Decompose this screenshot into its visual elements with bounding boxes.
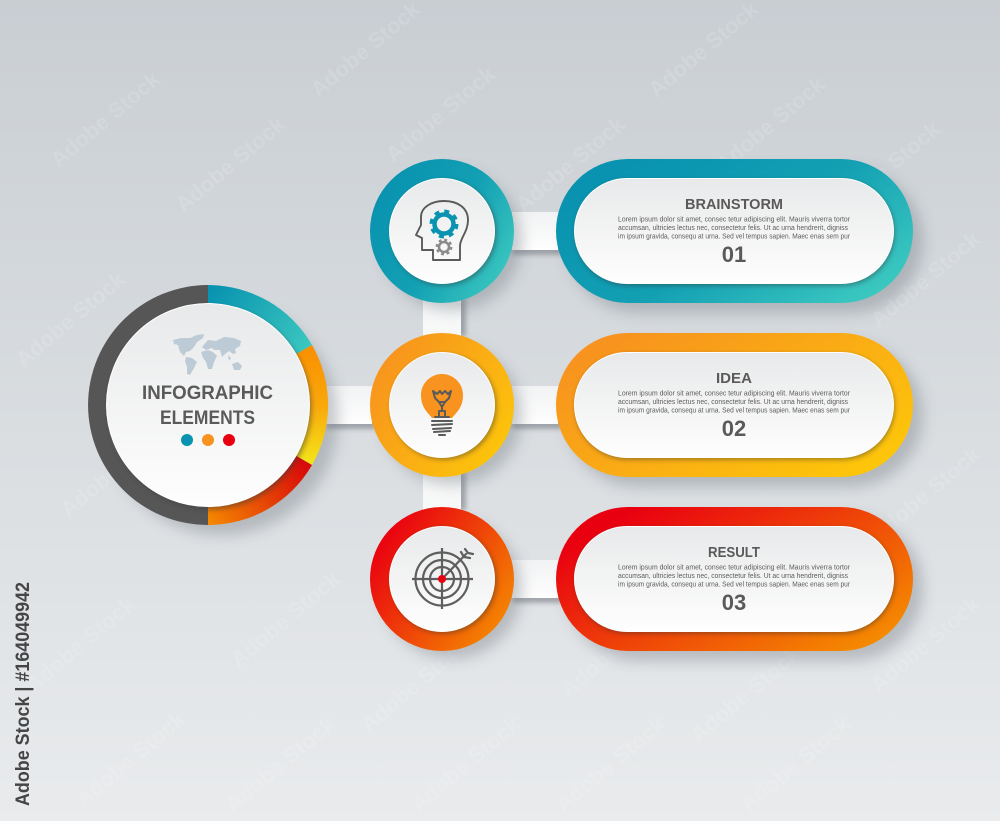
body text: Lorem ipsum dolor sit amet, consec tetur adipiscing elit. Mauris viverra tortor [618,562,850,572]
body text [618,214,850,240]
body text: Lorem ipsum dolor sit amet, consec tetur adipiscing elit. Mauris viverra tortor [618,388,850,398]
icon: world map [173,334,242,375]
watermarks: Adobe Stock [71,706,190,812]
body text: im ipsum gravida, consequ at urna. Sed vel tempus sapien. Maec enas sem pur [618,580,850,588]
watermarks: Adobe Stock [406,711,525,817]
watermarks: Adobe Stock [711,71,830,177]
number: 03 [722,590,746,615]
body text [618,562,850,588]
ring: teal segment [208,285,312,405]
body text: accumsan, ultricies lectus nec, consectetur felis. Ut ac urna hendrerit, digniss [618,571,848,580]
icon: target with arrow [412,548,473,609]
main face [106,304,310,506]
step 3 node: result icon circle [370,507,522,659]
watermarks: Adobe Stock [551,711,670,817]
heading: RESULT [708,545,760,561]
icon: light bulb [421,374,463,435]
watermarks: Adobe Stock [826,116,945,222]
connectors [326,212,558,598]
step 2 node: idea icon circle [370,333,522,485]
main circle [88,285,338,535]
watermarks: Adobe Stock [46,66,165,172]
watermarks: Adobe Stock [221,711,340,817]
body text: Lorem ipsum dolor sit amet, consec tetur adipiscing elit. Mauris viverra tortor [618,214,850,224]
panel: idea [556,333,923,487]
watermarks: Adobe Stock [21,591,140,697]
watermarks: Adobe Stock [556,596,675,702]
watermarks: Adobe Stock [356,631,475,737]
connector shadows [326,244,562,603]
watermarks: Adobe Stock [56,416,175,522]
watermarks: Adobe Stock [866,226,985,332]
heading: IDEA [716,371,753,387]
watermarks: Adobe Stock [686,641,805,747]
main face shadow [108,306,312,510]
watermarks: Adobe Stock [226,566,345,672]
watermarks: Adobe Stock [511,111,630,217]
body text [618,388,850,414]
body text: im ipsum gravida, consequ at urna. Sed vel tempus sapien. Maec enas sem pur [618,232,850,240]
watermarks: Adobe Stock [171,111,290,217]
body text: accumsan, ultricies lectus nec, consectetur felis. Ut ac urna hendrerit, digniss [618,397,848,406]
ring: yellow segment [208,345,328,465]
step 1 node: brainstorm icon circle [370,159,522,311]
number: 02 [722,416,746,441]
main title: INFOGRAPHIC [142,382,273,404]
heading: BRAINSTORM [685,197,783,213]
main title: ELEMENTS [160,407,255,429]
panel: result [556,507,923,661]
watermarks: Adobe Stock [866,591,985,697]
panel: brainstorm [556,159,923,313]
color dots [181,434,235,446]
watermarks: Adobe Stock [381,61,500,167]
main circle shadow [106,303,338,535]
number: 01 [722,242,746,267]
icon: head with gears [416,201,468,260]
body text: accumsan, ultricies lectus nec, consectetur felis. Ut ac urna hendrerit, digniss [618,223,848,232]
watermarks: Adobe Stock [866,441,985,547]
main title [142,382,273,429]
watermarks: Adobe Stock [736,711,855,817]
ring: red segment [208,405,312,525]
watermarks: Adobe Stock [11,266,130,372]
body text: im ipsum gravida, consequ at urna. Sed vel tempus sapien. Maec enas sem pur [618,406,850,414]
stock id side text: Adobe Stock | #164049942 [13,582,34,806]
ring: dark half [88,285,208,525]
